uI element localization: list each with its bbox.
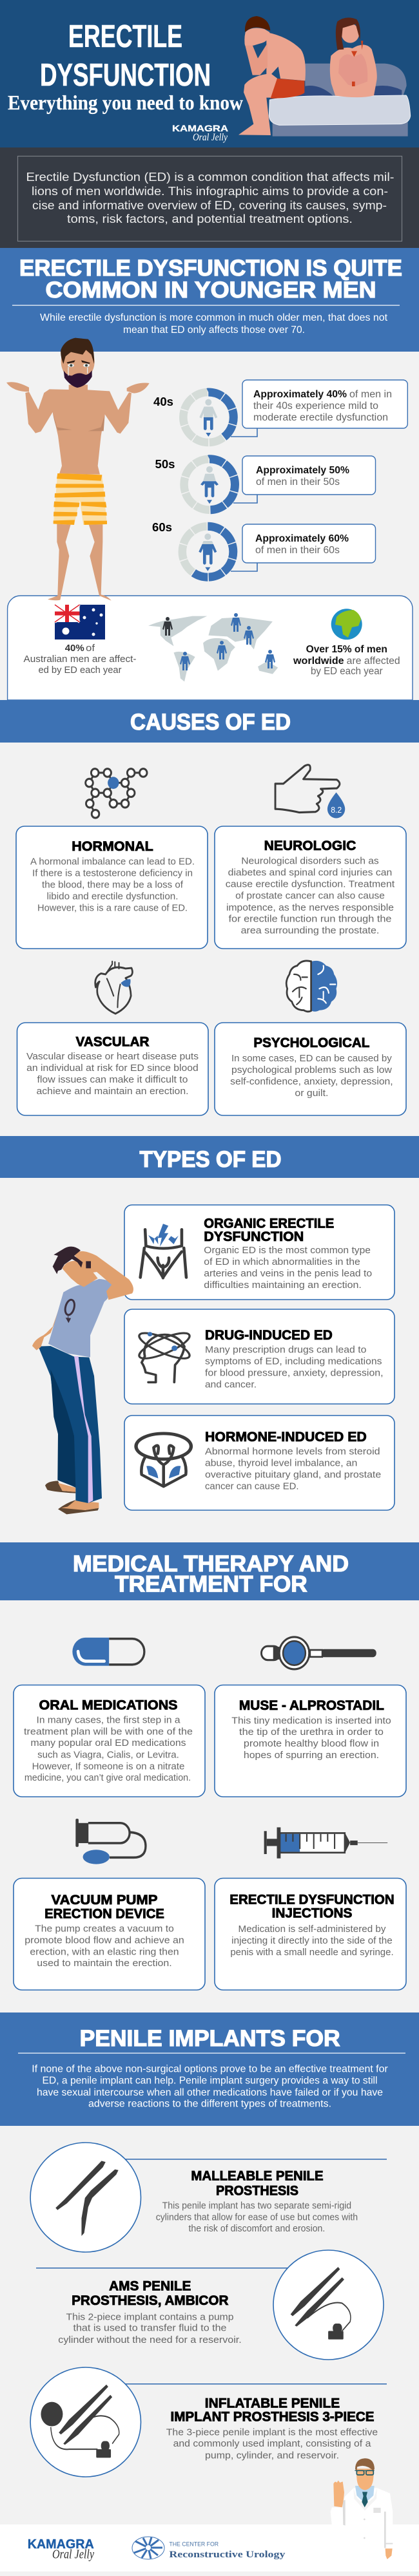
card: drug-induced ED: for blood pressure, anxiety, depression, [205, 1367, 383, 1378]
chart: world map with figures [148, 613, 278, 681]
text: introduction: toms, risk factors, and potential treatment options. [67, 213, 353, 225]
icon: vacuum pump [75, 1819, 146, 1864]
logo: Center for Reconstructive Urology [132, 2537, 286, 2560]
card: vascular: Vascular disease or heart disease puts [26, 1051, 199, 1062]
callout: 50s [233, 456, 375, 503]
footer [0, 2524, 419, 2571]
text: implants intro: ED, a penile implant can help. Penile implant surgery provides a way to still [43, 2075, 378, 2087]
card: neurologic [215, 826, 406, 949]
card: erectile dysfunction injections: penis with a small needle and syringe. [230, 1947, 394, 1958]
logo: Kamagra Oral Jelly: KAMAGRA [172, 123, 228, 133]
text: introduction: cise and informative overview of ED, covering its causes, symp- [32, 199, 387, 212]
card: MUSE alprostadil: promote healthy blood flow in [244, 1738, 379, 1749]
text: worldwide statistic: are affected [347, 656, 400, 667]
card: vacuum pump erection device: erection, with an elastic ring then [30, 1946, 179, 1957]
heading band: medical therapy: MEDICAL THERAPY AND [73, 1551, 349, 1577]
panel: header [0, 0, 419, 147]
heading band: medical therapy: TREATMENT FOR [115, 1571, 307, 1596]
icon: brain [286, 961, 337, 1012]
icon: capsule [72, 1638, 144, 1666]
panel: younger men banner [0, 248, 419, 352]
card: neurologic: of prostate cancer can also cause [235, 890, 385, 902]
text: AMS: cylinder without the need for a reservoir. [58, 2334, 242, 2345]
card: vascular: achieve and maintain an erection. [36, 1086, 188, 1097]
text: Australian statistic [23, 643, 137, 676]
panel: worldwide statistics [8, 596, 413, 700]
card: psychological: self-confidence, anxiety, depression, [230, 1076, 393, 1087]
card: vacuum pump erection device: used to maintain the erection. [37, 1958, 172, 1969]
illustration: man checking loose trousers [32, 1247, 133, 1514]
text: inflatable: INFLATABLE PENILE [205, 2396, 340, 2410]
callout: 40s [231, 380, 407, 437]
panel: malleable penile prosthesis [30, 2143, 387, 2252]
text: worldwide statistic: Over 15% of men [306, 644, 387, 655]
text: introduction [26, 171, 395, 225]
card: organic erectile dysfunction: arteries and veins in the penis lead to [204, 1268, 372, 1279]
text: malleable: PROSTHESIS [216, 2183, 298, 2198]
card: hormonal: A hormonal imbalance can lead to ED. [30, 856, 195, 867]
card: oral medications: ORAL MEDICATIONS [39, 1698, 178, 1713]
card: MUSE alprostadil: the tip of the urethra in order to [239, 1727, 384, 1738]
icon: heart [95, 961, 132, 1014]
heading band: causes of ED: CAUSES OF ED [130, 710, 291, 735]
text: inflatable: IMPLANT PROSTHESIS 3-PIECE [170, 2410, 374, 2425]
card: drug-induced ED [124, 1309, 395, 1404]
card: drug-induced ED: Many prescription drugs can lead to [205, 1344, 366, 1355]
card: erectile dysfunction injections: Medication is self-administered by [239, 1924, 386, 1935]
card: hormonal: libido and erectile dysfunction. [46, 891, 178, 902]
text: malleable: cylinders that allow for ease of use but comes with [156, 2211, 358, 2222]
text: worldwide statistic [293, 644, 400, 677]
heading band: types of ED: TYPES OF ED [139, 1147, 281, 1172]
icon: MUSE applicator [261, 1637, 376, 1669]
text: implants intro: If none of the above non-surgical options prove to be an effective treatment for [32, 2064, 388, 2075]
panel: AMS penile prosthesis [36, 2250, 384, 2360]
callout: 50s: Approximately 50% [256, 465, 349, 476]
card: MUSE alprostadil: This tiny medication is inserted into [231, 1715, 391, 1726]
title: DYSFUNCTION [40, 58, 211, 93]
card: oral medications: treatment plan will be with one of the [24, 1726, 193, 1737]
heading: penile implants: PENILE IMPLANTS FOR [80, 2026, 340, 2051]
card: neurologic: for erectile function run through the [228, 914, 392, 925]
illustration: shrugging man [6, 338, 150, 601]
label: 50s: 50s [155, 458, 175, 471]
text: malleable: This penile implant has two separate semi-rigid [162, 2200, 351, 2211]
text: Australian statistic: 40% [65, 643, 84, 654]
heading: younger men: COMMON IN YOUNGER MEN [45, 278, 376, 303]
card: neurologic: area surrounding the prostate. [241, 925, 379, 936]
heading: younger men: ERECTILE DYSFUNCTION IS QUITE [19, 256, 402, 281]
card: vacuum pump erection device [14, 1878, 205, 1990]
card: vacuum pump erection device: promote blood flow and achieve an [24, 1935, 184, 1946]
text: banner subtitle [40, 312, 388, 336]
card: organic erectile dysfunction: difficulties maintaining an erection. [204, 1280, 362, 1291]
card: vacuum pump erection device: The pump creates a vacuum to [35, 1924, 174, 1935]
card: oral medications: medicine, you can’t give oral medication. [24, 1772, 191, 1783]
heading: younger men [19, 256, 402, 303]
heading band: causes of ED [0, 700, 419, 743]
heading band: types of ED [0, 1136, 419, 1178]
logo: Kamagra Oral Jelly footer [28, 2537, 94, 2562]
text: implants intro: adverse reactions to the different types of treatments. [88, 2099, 331, 2110]
card: neurologic: impotence, as the nerves responsible [226, 902, 394, 913]
text: malleable [156, 2168, 358, 2234]
icon: syringe [264, 1827, 387, 1859]
card: vacuum pump erection device: ERECTION DEVICE [44, 1907, 164, 1922]
card: hormonal [16, 826, 208, 949]
card: psychological: or guilt. [295, 1088, 328, 1099]
label: 40s: 40s [153, 395, 173, 408]
text: malleable: the risk of discomfort and erosion. [188, 2223, 325, 2234]
chart: gauge 60s [152, 521, 233, 577]
text: Australian statistic: Australian men are affect- [23, 654, 137, 665]
label: 60s: 60s [152, 521, 172, 534]
callout: 60s [231, 524, 375, 571]
section background rule: age gauges [152, 380, 407, 577]
icon: two-piece implant [273, 2250, 384, 2360]
card: drug-induced ED: and cancer. [205, 1379, 257, 1390]
icon: head with orbits [136, 1329, 193, 1382]
card: organic erectile dysfunction [124, 1205, 395, 1300]
card: vascular: VASCULAR [76, 1034, 150, 1050]
card: neurologic: NEUROLOGIC [264, 838, 356, 853]
card: neurologic: Neurological disorders such as [241, 855, 379, 867]
logo: Kamagra Oral Jelly footer: KAMAGRA [28, 2537, 94, 2552]
card: oral medications: However, If someone is on a nitrate [32, 1761, 184, 1772]
card: organic erectile dysfunction: Organic ED is the most common type [204, 1245, 371, 1256]
card: hormonal: If there is a testosterone deficiency in [32, 868, 193, 878]
icon: pelvis with lightning [141, 1224, 186, 1278]
text: droplet value: 8.2 [331, 805, 342, 815]
callout: 50s: of men in their 50s [256, 477, 340, 488]
callout: 60s: of men in their 60s [255, 545, 340, 556]
logo: Center for Reconstructive Urology: Reconstructive Urology [169, 2550, 286, 2560]
card: erectile dysfunction injections [215, 1878, 406, 1990]
card: oral medications [14, 1685, 205, 1797]
card: neurologic: diabetes and spinal cord injuries can [228, 867, 392, 878]
card: vascular [17, 1023, 208, 1115]
text: malleable: MALLEABLE PENILE [191, 2168, 324, 2183]
heading band: medical therapy [0, 1542, 419, 1600]
icon: Australian flag [55, 605, 105, 639]
chart: gauge 50s [155, 458, 235, 510]
card: psychological: psychological problems such as low [231, 1065, 392, 1075]
card: hormone-induced ED: Abnormal hormone levels from steroid [205, 1446, 380, 1457]
logo: Kamagra Oral Jelly footer: Oral Jelly [52, 2548, 94, 2562]
callout: 40s: Approximately 40% [253, 389, 347, 400]
icon: three-piece implant [30, 2367, 141, 2477]
card: psychological: In some cases, ED can be caused by [231, 1053, 392, 1064]
text: AMS: that is used to transfer fluid to the [73, 2322, 227, 2334]
card: vascular: flow issues can make it difficult to [37, 1074, 188, 1085]
card: hormonal: HORMONAL [72, 839, 153, 854]
logo: Center for Reconstructive Urology: THE CENTER FOR [169, 2541, 219, 2548]
text: AMS [58, 2278, 242, 2345]
card: hormonal: However, this is a rare cause of ED. [37, 903, 188, 914]
text: banner subtitle: While erectile dysfunction is more common in much older men, that does not [40, 312, 388, 323]
illustration: couple on bed [239, 16, 411, 137]
text: AMS: This 2-piece implant contains a pump [66, 2311, 233, 2322]
text: implants intro [32, 2064, 388, 2110]
text: Australian statistic: ed by ED each year [39, 665, 121, 676]
text: implants intro: have sexual intercourse when all other medications have failed or if you have [37, 2087, 383, 2098]
panel: penile implants banner [0, 2012, 419, 2126]
title: Everything you need to know [8, 91, 243, 114]
card: hormone-induced ED: overactive pituitary gland, and prostate [205, 1470, 381, 1480]
title [8, 19, 243, 114]
card: hormone-induced ED: HORMONE-INDUCED ED [205, 1430, 367, 1444]
card: neurologic: cause erectile dysfunction. Treatment [226, 879, 395, 890]
card: MUSE alprostadil: hopes of spurring an erection. [244, 1750, 379, 1761]
card: erectile dysfunction injections: INJECTIONS [272, 1906, 352, 1921]
card: MUSE alprostadil [215, 1685, 406, 1797]
text: Australian statistic: of [86, 643, 95, 654]
text: inflatable: The 3-piece penile implant is the most effective [166, 2427, 378, 2438]
callout: 40s: their 40s experience mild to [253, 401, 378, 412]
card: hormonal: the blood, there may be a loss of [42, 880, 184, 891]
logo: Kamagra Oral Jelly [172, 123, 228, 143]
text: worldwide statistic: by ED each year [311, 666, 383, 677]
logo: Kamagra Oral Jelly: Oral Jelly [193, 132, 228, 143]
text: banner subtitle: mean that ED only affects those over 70. [123, 325, 305, 336]
panel: inflatable penile implant [30, 2367, 387, 2477]
card: hormone-induced ED: cancer can cause ED. [205, 1481, 299, 1492]
card: vascular: an individual at risk for ED since blood [26, 1063, 199, 1074]
icon: malleable implant [30, 2143, 141, 2252]
chart: gauge 40s [153, 392, 233, 442]
card: MUSE alprostadil: MUSE - ALPROSTADIL [239, 1698, 384, 1713]
card: oral medications: In many cases, the first step in a [36, 1714, 180, 1725]
card: hormone-induced ED [124, 1416, 395, 1510]
icon: pointing hand with drop [275, 765, 345, 819]
card: drug-induced ED: symptoms of ED, including medications [205, 1356, 382, 1367]
callout: 40s: moderate erectile dysfunction [253, 412, 388, 423]
text: worldwide statistic: worldwide [293, 656, 344, 667]
icon: globe [331, 609, 362, 639]
card: organic erectile dysfunction: of ED in which abnormalities in the [204, 1256, 360, 1267]
text: AMS: PROSTHESIS, AMBICOR [72, 2293, 228, 2308]
card: psychological [215, 1023, 406, 1115]
card: organic erectile dysfunction: DYSFUNCTION [204, 1229, 304, 1244]
text: inflatable: pump, cylinder, and reservoir. [205, 2450, 339, 2461]
card: oral medications: such as Viagra, Cialis, or Levitra. [37, 1749, 179, 1761]
icon: hormone molecule [86, 769, 147, 818]
title: ERECTILE [68, 19, 182, 54]
text: inflatable: and commonly used implant, consisting of a [173, 2438, 371, 2449]
card: oral medications: many popular oral ED medications [31, 1738, 186, 1748]
panel: introduction [0, 147, 419, 248]
callout: 60s: Approximately 60% [255, 533, 349, 544]
text: AMS: AMS PENILE [109, 2278, 191, 2293]
text: introduction: Erectile Dysfunction (ED) is a common condition that affects mil- [26, 171, 395, 184]
card: organic erectile dysfunction: ORGANIC ERECTILE [204, 1216, 334, 1231]
text: inflatable [166, 2396, 378, 2461]
card: hormone-induced ED: abuse, thyroid level imbalance, an [205, 1458, 357, 1468]
card: psychological: PSYCHOLOGICAL [253, 1036, 370, 1050]
card: erectile dysfunction injections: injecting it directly into the side of the [231, 1935, 393, 1946]
card: erectile dysfunction injections: ERECTILE DYSFUNCTION [229, 1893, 395, 1908]
text: introduction: lions of men worldwide. This infographic aims to provide a con- [32, 185, 388, 198]
callout: 40s: of men in [349, 389, 392, 400]
icon: prostate [136, 1434, 191, 1486]
card: vacuum pump erection device: VACUUM PUMP [52, 1893, 157, 1908]
illustration: doctor [331, 2458, 393, 2559]
card: drug-induced ED: DRUG-INDUCED ED [205, 1328, 333, 1343]
